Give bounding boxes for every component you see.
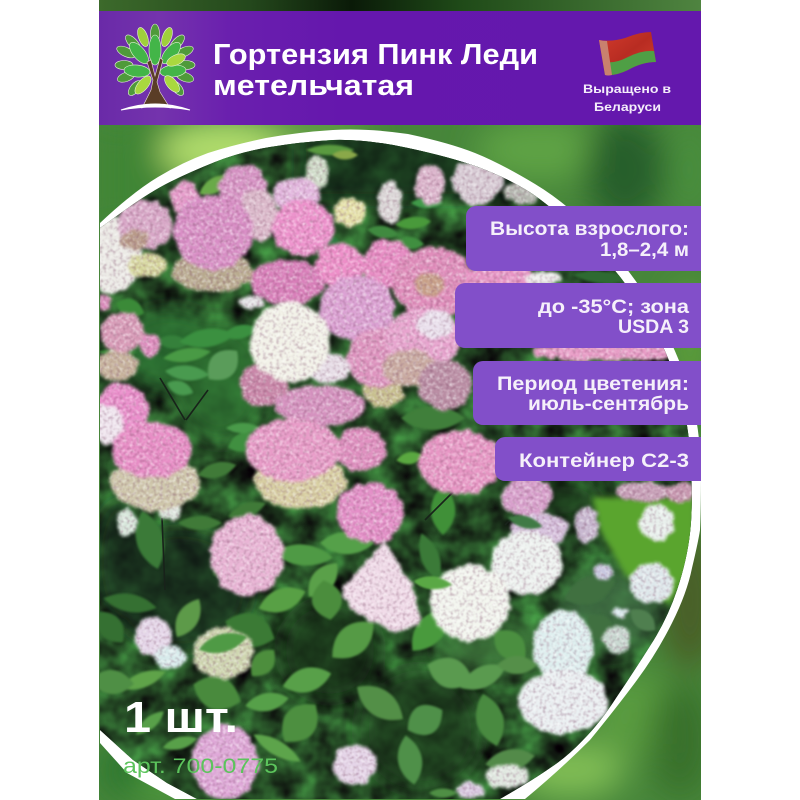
panel: frost hardiness: до -35°С; зона bbox=[538, 297, 689, 318]
panel: flowering period bbox=[473, 361, 701, 425]
article number: арт. 700-0775 bbox=[123, 755, 278, 778]
dark foliage depth bbox=[95, 130, 600, 790]
caption: grown in Belarus: Беларуси bbox=[594, 100, 661, 114]
title bbox=[213, 39, 538, 102]
title: Гортензия Пинк Леди bbox=[213, 39, 538, 71]
leaves bbox=[88, 145, 661, 798]
panel: flowering period: июль-сентябрь bbox=[528, 394, 689, 415]
panel: container bbox=[495, 437, 701, 481]
caption: grown in Belarus bbox=[583, 82, 671, 114]
icon: Belarus flag bbox=[599, 32, 656, 76]
caption: grown in Belarus: Выращено в bbox=[583, 82, 671, 96]
panel: height: Высота взрослого: bbox=[490, 219, 689, 240]
panel: frost hardiness bbox=[455, 283, 701, 348]
title: метельчатая bbox=[213, 70, 414, 102]
panel: container: Контейнер С2-3 bbox=[519, 451, 689, 472]
stems bbox=[160, 378, 530, 590]
lawn bbox=[592, 497, 695, 605]
photo frame: white arc ring bbox=[100, 130, 701, 799]
photo: hydrangea bush bbox=[84, 125, 701, 800]
logo: tree bbox=[115, 24, 195, 110]
panel: height: 1,8–2,4 м bbox=[600, 240, 689, 261]
leaves overlapping flowers bbox=[197, 512, 544, 658]
quantity label: 1 шт. bbox=[124, 693, 238, 742]
panel: height bbox=[466, 206, 701, 271]
flower clusters bbox=[84, 156, 695, 799]
header banner bbox=[99, 11, 701, 125]
panel: frost hardiness: USDA 3 bbox=[618, 317, 689, 338]
panel: flowering period: Период цветения: bbox=[497, 374, 689, 395]
background: blurred green backdrop bbox=[99, 0, 720, 800]
